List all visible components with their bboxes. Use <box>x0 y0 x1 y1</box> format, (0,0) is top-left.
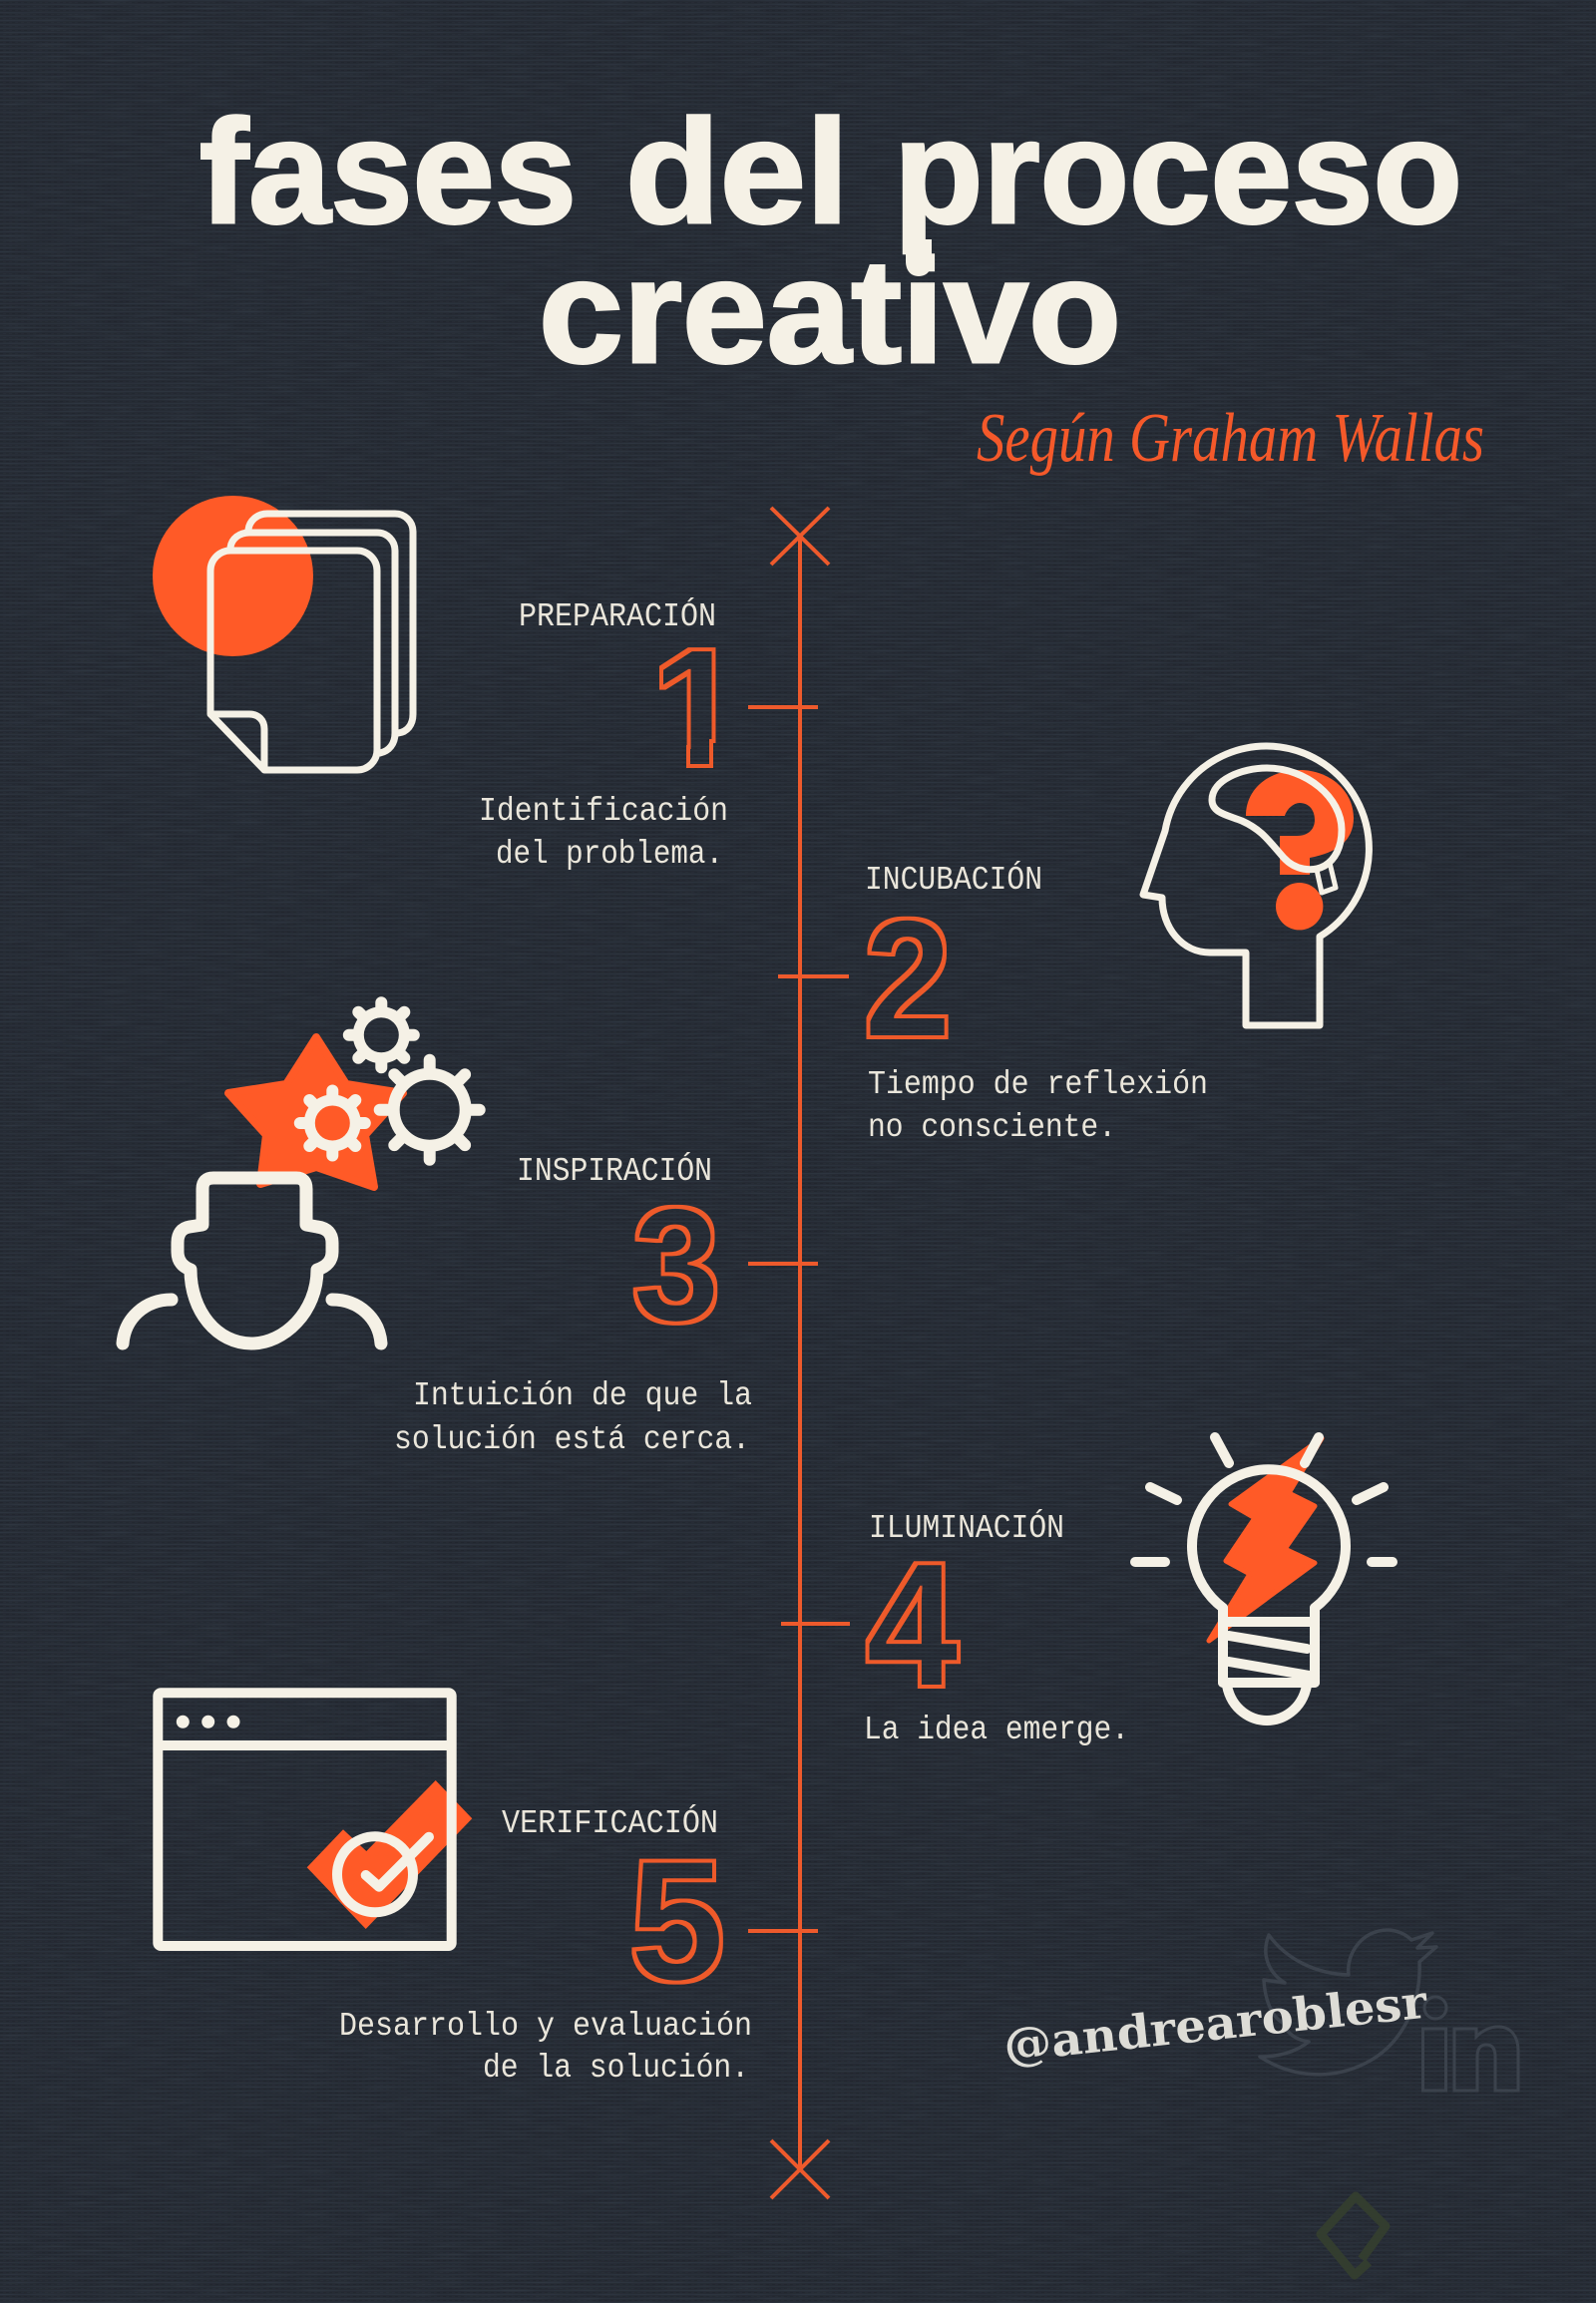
phase 3: inspiración <box>123 1002 752 1458</box>
icon: linkedin outline <box>1422 1997 1518 2091</box>
title: proceso <box>894 90 1462 254</box>
description 1 <box>479 793 728 873</box>
phase 2: incubación <box>864 746 1369 1146</box>
number 3: 3 <box>632 1175 720 1355</box>
icon: browser window with check <box>158 1693 472 1946</box>
title: creativo <box>539 229 1121 394</box>
description 1: del problema. <box>496 836 723 873</box>
title: del <box>625 90 849 254</box>
number 5: 5 <box>629 1825 725 2017</box>
logo watermark <box>1321 2196 1386 2275</box>
icon: light bulb with bolt <box>1135 1437 1393 1721</box>
description 3 <box>394 1377 752 1458</box>
description 2: Tiempo de reflexión <box>868 1066 1208 1103</box>
timeline <box>748 508 850 2198</box>
description 1: Identificación <box>479 793 728 830</box>
description 2: no consciente. <box>868 1109 1116 1146</box>
description 4: La idea emerge. <box>864 1712 1129 1748</box>
number 4: 4 <box>866 1526 959 1724</box>
subtitle: Según Graham Wallas <box>977 400 1484 477</box>
number 2: 2 <box>864 885 952 1072</box>
title <box>200 90 1462 394</box>
number 1: 1 <box>651 615 743 801</box>
description 3: Intuición de que la <box>413 1377 752 1414</box>
heading: incubación: INCUBACIÓN <box>865 861 1042 899</box>
phase 1: preparación <box>153 496 743 873</box>
heading: verificación: VERIFICACIÓN <box>502 1804 718 1842</box>
description 5: de la solución. <box>483 2050 749 2087</box>
handle: @andrearoblesr <box>1001 1975 1430 2073</box>
heading: inspiración: INSPIRACIÓN <box>517 1152 712 1190</box>
phase 5: verificación <box>158 1693 752 2087</box>
description 5 <box>339 2008 752 2087</box>
heading: preparación: PREPARACIÓN <box>519 597 716 635</box>
icon: person with star and gears <box>123 1002 480 1343</box>
description 5: Desarrollo y evaluación <box>339 2008 752 2045</box>
description 3: solución está cerca. <box>394 1421 750 1458</box>
heading: iluminación: ILUMINACIÓN <box>869 1509 1064 1547</box>
icon: head with question mark <box>1143 746 1369 1025</box>
icon: stacked documents <box>153 496 413 770</box>
title: fases <box>200 90 577 254</box>
description 2 <box>868 1066 1208 1146</box>
phase 4: iluminación <box>864 1437 1393 1748</box>
icon: twitter bird outline <box>1260 1930 1436 2075</box>
